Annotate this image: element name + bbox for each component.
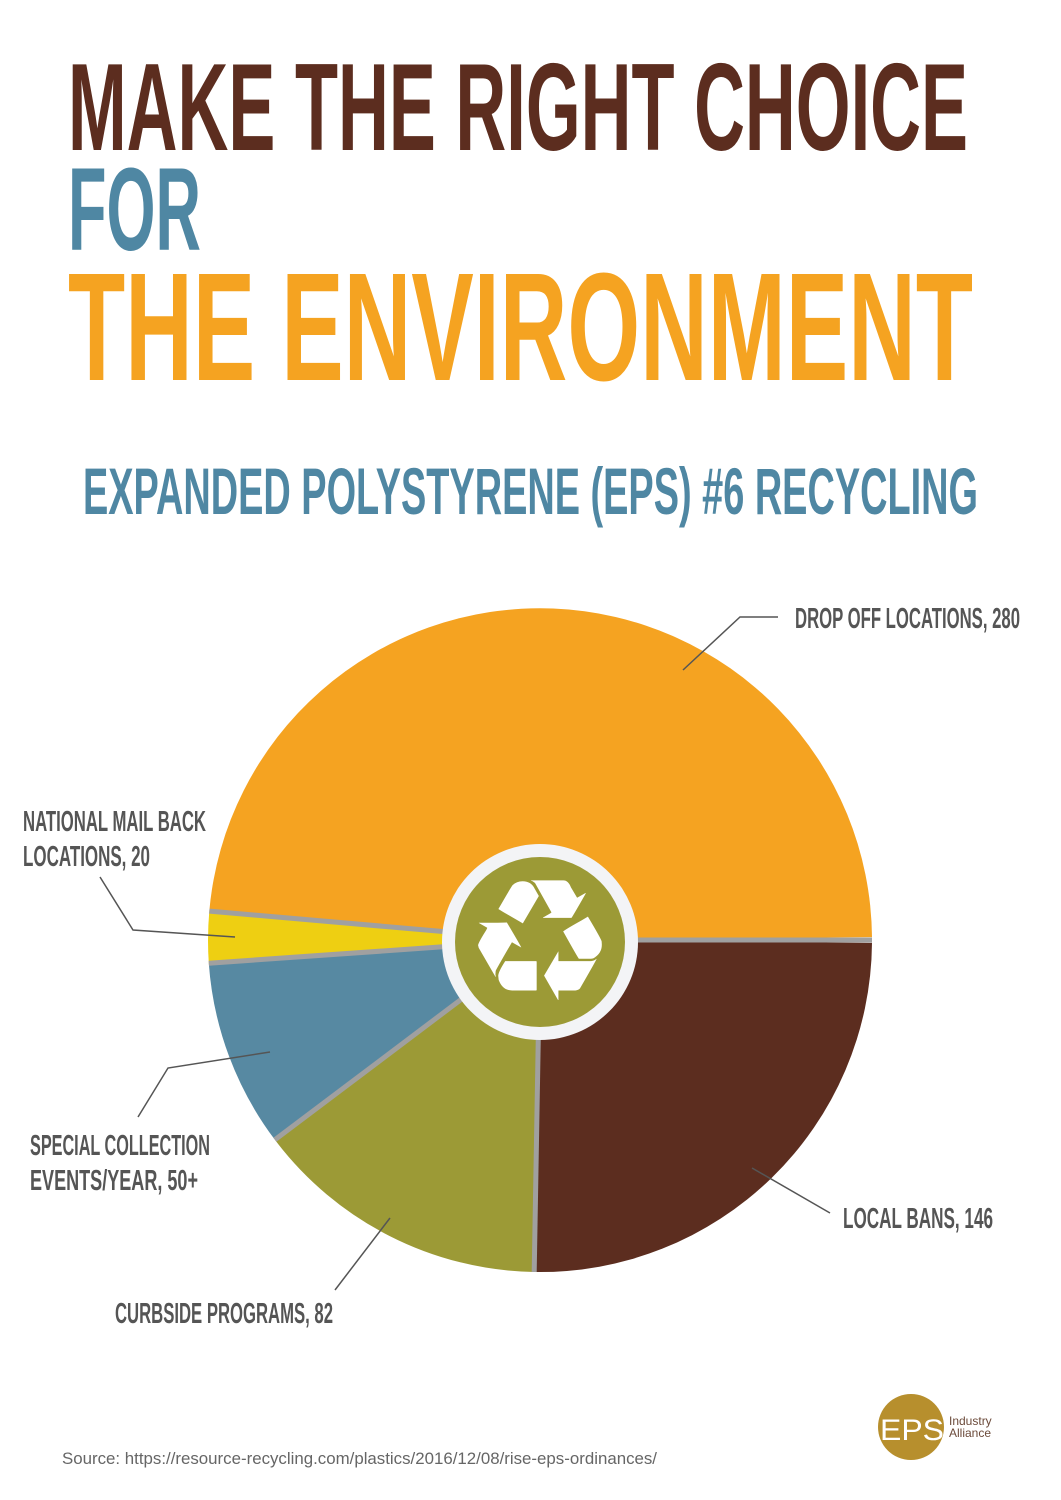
- slice: local bans: [534, 940, 872, 1272]
- labels: NATIONAL MAIL BACK: [23, 806, 206, 838]
- source: Source: https://resource-recycling.com/plastics/2016/12/08/rise-eps-ordinances/: [62, 1449, 657, 1468]
- slice: special collection: [209, 940, 540, 1140]
- slice: curbside: [275, 940, 540, 1272]
- logo: Alliance: [949, 1426, 991, 1440]
- logo: EPS: [880, 1414, 944, 1447]
- labels: CURBSIDE PROGRAMS, 82: [115, 1298, 333, 1330]
- labels: EVENTS/YEAR, 50+: [30, 1165, 198, 1197]
- title: FOR: [68, 144, 201, 276]
- labels: [23, 603, 1020, 1330]
- title: [68, 39, 973, 413]
- leader lines: [100, 617, 830, 1290]
- slice: mail back: [208, 911, 540, 963]
- pie chart: [208, 608, 872, 1272]
- labels: LOCATIONS, 20: [23, 841, 150, 873]
- logo: [878, 1394, 992, 1460]
- slice: drop off: [209, 608, 872, 940]
- center icon: recycle: ♻: [464, 843, 616, 1041]
- logo: Industry: [949, 1414, 992, 1428]
- labels: SPECIAL COLLECTION: [30, 1130, 210, 1162]
